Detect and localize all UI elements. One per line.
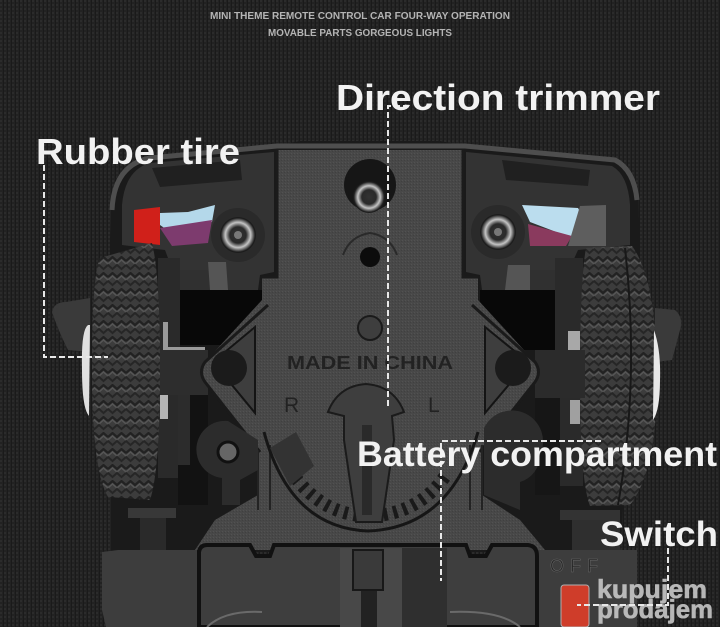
icon: rubber tires [82, 243, 660, 506]
embossed text: MADE IN CHINA [287, 353, 453, 373]
central steering plate: R [284, 394, 299, 417]
heading: MOVABLE PARTS GORGEOUS LIGHTS [268, 27, 452, 39]
wheel hubs [158, 258, 180, 478]
watermark [597, 574, 713, 624]
watermark: kupujem [597, 574, 707, 604]
label: rubber tire: Rubber tire [36, 131, 240, 172]
switch panel [550, 556, 598, 627]
label: direction trimmer: Direction trimmer [336, 77, 660, 118]
top screw [344, 159, 396, 211]
vent slots [152, 160, 242, 187]
coloured wires [134, 205, 606, 246]
screw mounts [208, 205, 530, 290]
label: switch: Switch [600, 515, 718, 554]
heading [210, 10, 510, 39]
bright trim [163, 322, 205, 351]
dial [264, 432, 478, 531]
side triangles [213, 327, 255, 413]
upper wells [122, 152, 274, 290]
heading: MINI THEME REMOTE CONTROL CAR FOUR-WAY OPERATION [210, 10, 510, 22]
central steering plate [195, 150, 545, 550]
watermark: prodajem [597, 594, 713, 624]
lower body [102, 550, 637, 627]
switch panel: OFF [550, 556, 598, 576]
axle stubs [160, 350, 585, 398]
round side mounts [196, 410, 543, 510]
holes [343, 233, 397, 255]
battery cover [199, 545, 537, 627]
car rear body [110, 141, 640, 552]
undercarriage struts [128, 508, 176, 518]
black cavities [178, 290, 262, 345]
side mirrors [52, 298, 681, 362]
central steering plate: L [428, 394, 440, 417]
label: battery compartment: Battery compartment [357, 435, 717, 474]
leader lines [44, 106, 668, 605]
